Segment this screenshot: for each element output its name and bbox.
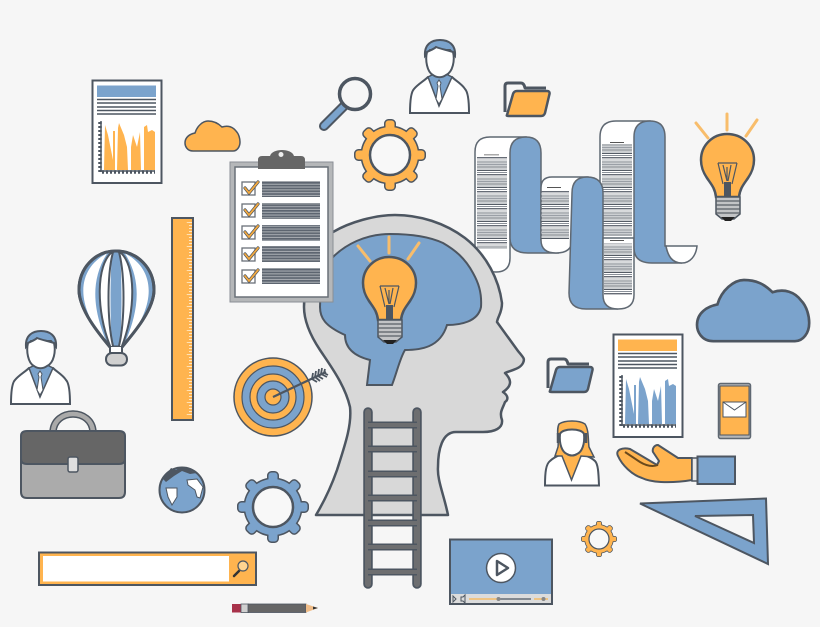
icon: search — [234, 561, 248, 576]
icon: globe — [160, 467, 204, 512]
icon: blue folder — [548, 359, 593, 392]
icon: open hand — [617, 445, 735, 484]
icon: pencil — [232, 604, 318, 612]
icon: magnifying glass — [324, 78, 370, 126]
icon: orange folder — [505, 83, 550, 116]
icon: report with orange chart — [92, 80, 162, 183]
icon: report with blue chart — [614, 334, 682, 437]
search bar — [39, 552, 256, 585]
clipboard checklist — [230, 150, 333, 302]
scroll documents — [475, 121, 697, 309]
icon: blue gear — [238, 472, 308, 542]
brain — [320, 234, 481, 385]
scroll three upper sheet — [600, 121, 650, 250]
icon: person top — [410, 40, 469, 113]
icon: orange cloud — [185, 121, 240, 151]
checklist rows — [242, 181, 320, 284]
scroll three blue roll — [634, 121, 697, 263]
icon: light bulb in brain — [358, 237, 419, 344]
scroll two — [541, 177, 617, 309]
icon: small orange gear — [582, 522, 616, 556]
scroll one — [475, 137, 557, 272]
player controls — [453, 595, 548, 603]
icon: female person — [545, 421, 599, 486]
icon: orange gear — [356, 120, 424, 190]
icon: light bulb top right — [696, 114, 757, 221]
ladder — [368, 412, 417, 584]
icon: set square — [640, 498, 768, 564]
play button — [486, 554, 516, 582]
video player — [450, 540, 552, 604]
icon: blue cloud — [697, 280, 809, 341]
scroll three lower sheet — [603, 238, 634, 309]
icon: ruler — [172, 218, 193, 420]
head silhouette with brain — [304, 215, 524, 515]
icon: target with arrow — [234, 358, 328, 436]
clip — [258, 150, 305, 169]
icon: phone with envelope — [718, 384, 750, 438]
icon: person left — [11, 331, 70, 404]
icon: hot air balloon — [79, 251, 154, 366]
icon: briefcase — [21, 414, 125, 498]
